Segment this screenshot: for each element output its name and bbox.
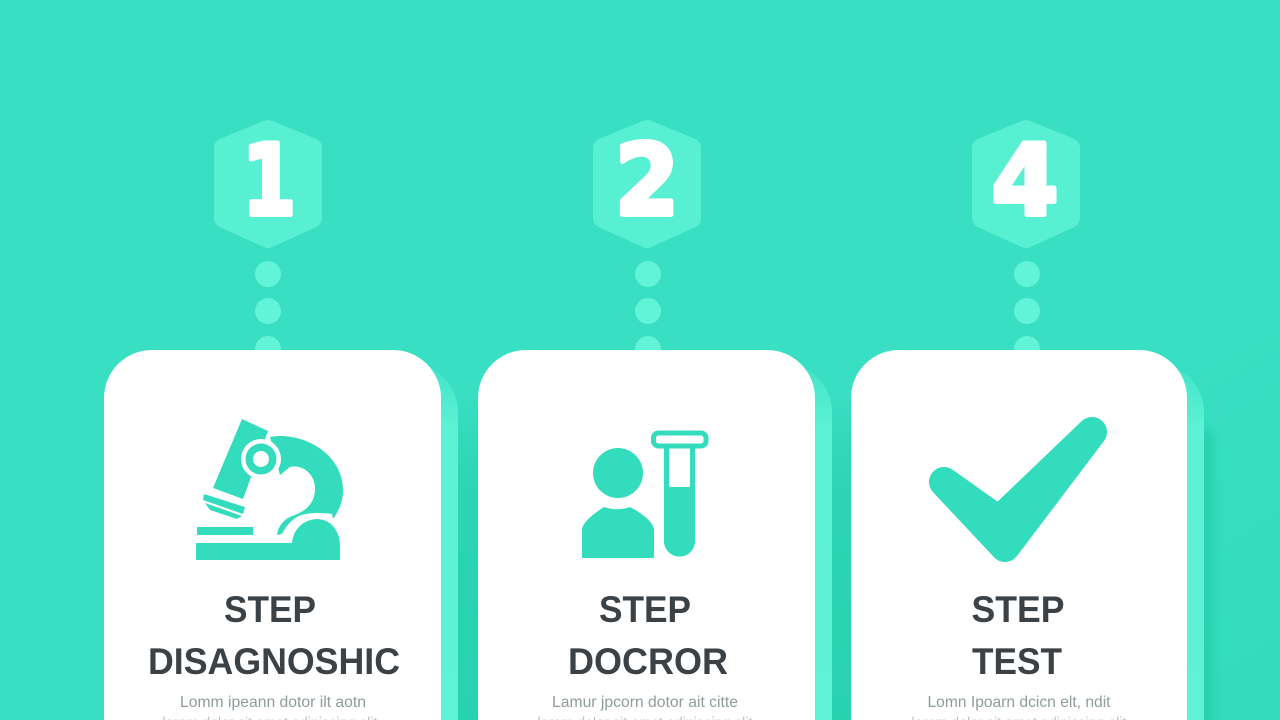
heading: step docror: DOCROR [568, 641, 728, 682]
heading: step test: TEST [972, 641, 1062, 682]
text block: step 3 description [912, 694, 1127, 720]
icon: microscope [196, 419, 343, 560]
icon: person with test tube [582, 433, 706, 558]
text block: step 3 description: Lomn Ipoarn dcicn elt, ndit [928, 694, 1111, 711]
badge: number 4: 4 [992, 124, 1058, 238]
heading: step test [972, 589, 1064, 682]
heading: step docror: STEP [599, 589, 691, 630]
heading: step disagnoshic: DISAGNOSHIC [148, 641, 400, 682]
text block: step 1 description: Lomm ipeann dotor ilt aotn [180, 694, 366, 711]
panel: step 2 card [478, 350, 851, 720]
step 1: diagnostic [104, 124, 478, 720]
text block: step 2 description [538, 694, 753, 720]
step 3: test [851, 124, 1214, 720]
heading: step docror [568, 589, 728, 682]
step 2: doctor [478, 124, 851, 720]
connector dots 3 [1014, 261, 1040, 362]
badge: number 2: 2 [615, 124, 679, 238]
icon: check mark [944, 432, 1092, 547]
heading: step disagnoshic [148, 589, 400, 682]
panel: step 3 card [851, 350, 1214, 720]
connector dots 2 [635, 261, 661, 362]
connector dots 1 [255, 261, 281, 362]
text block: step 2 description: Lamur jpcorn dotor ait citte [552, 694, 738, 711]
badge: number 1: 1 [242, 124, 296, 238]
panel: step 1 card [104, 350, 478, 720]
heading: step test: STEP [972, 589, 1064, 630]
text block: step 1 description [162, 694, 378, 720]
heading: step disagnoshic: STEP [224, 589, 316, 630]
